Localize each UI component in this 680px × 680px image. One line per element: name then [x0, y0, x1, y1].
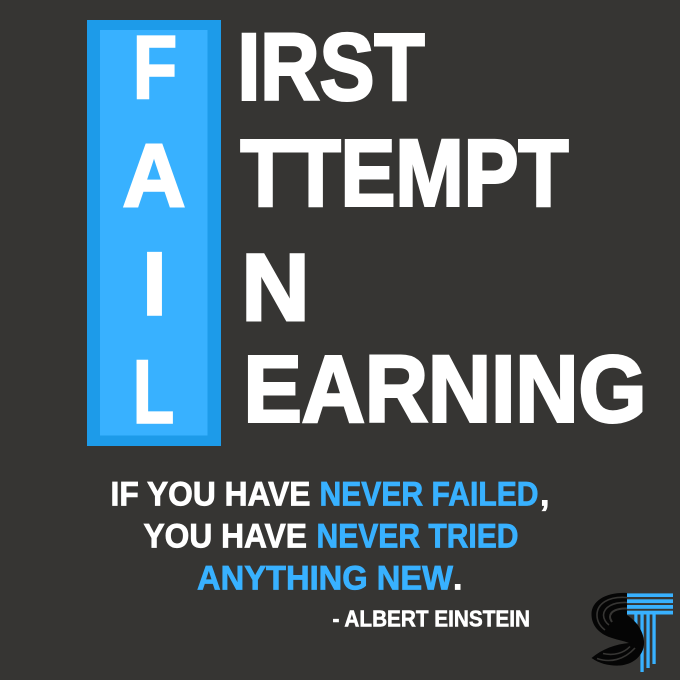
- quote line 3: .: [453, 560, 462, 598]
- letter L: L: [133, 342, 174, 442]
- quote line 2: [144, 517, 518, 555]
- quote line 1: [110, 475, 549, 513]
- heading: TTEMPT: TTEMPT: [240, 120, 568, 226]
- logo: ST monogram: [591, 593, 673, 672]
- letter A: A: [122, 125, 186, 225]
- quote line 3: ANYTHING NEW: [197, 560, 454, 598]
- heading: EARNING: EARNING: [244, 336, 646, 442]
- quote line 2: NEVER TRIED: [316, 517, 518, 555]
- quote line 1: IF YOU HAVE: [110, 475, 310, 513]
- heading: IRST: IRST: [238, 14, 424, 120]
- quote line 1: NEVER FAILED: [320, 475, 538, 513]
- attribution: - ALBERT EINSTEIN: [332, 605, 530, 631]
- quote text: [110, 475, 549, 598]
- heading: N: N: [242, 235, 310, 341]
- panel: FAIL acronym column: [87, 17, 221, 446]
- letter F: F: [133, 17, 177, 117]
- logo T: [627, 593, 673, 672]
- logo S: [591, 593, 644, 666]
- quote line 1: ,: [540, 475, 549, 513]
- letter I: I: [142, 234, 166, 334]
- quote line 2: YOU HAVE: [144, 517, 307, 555]
